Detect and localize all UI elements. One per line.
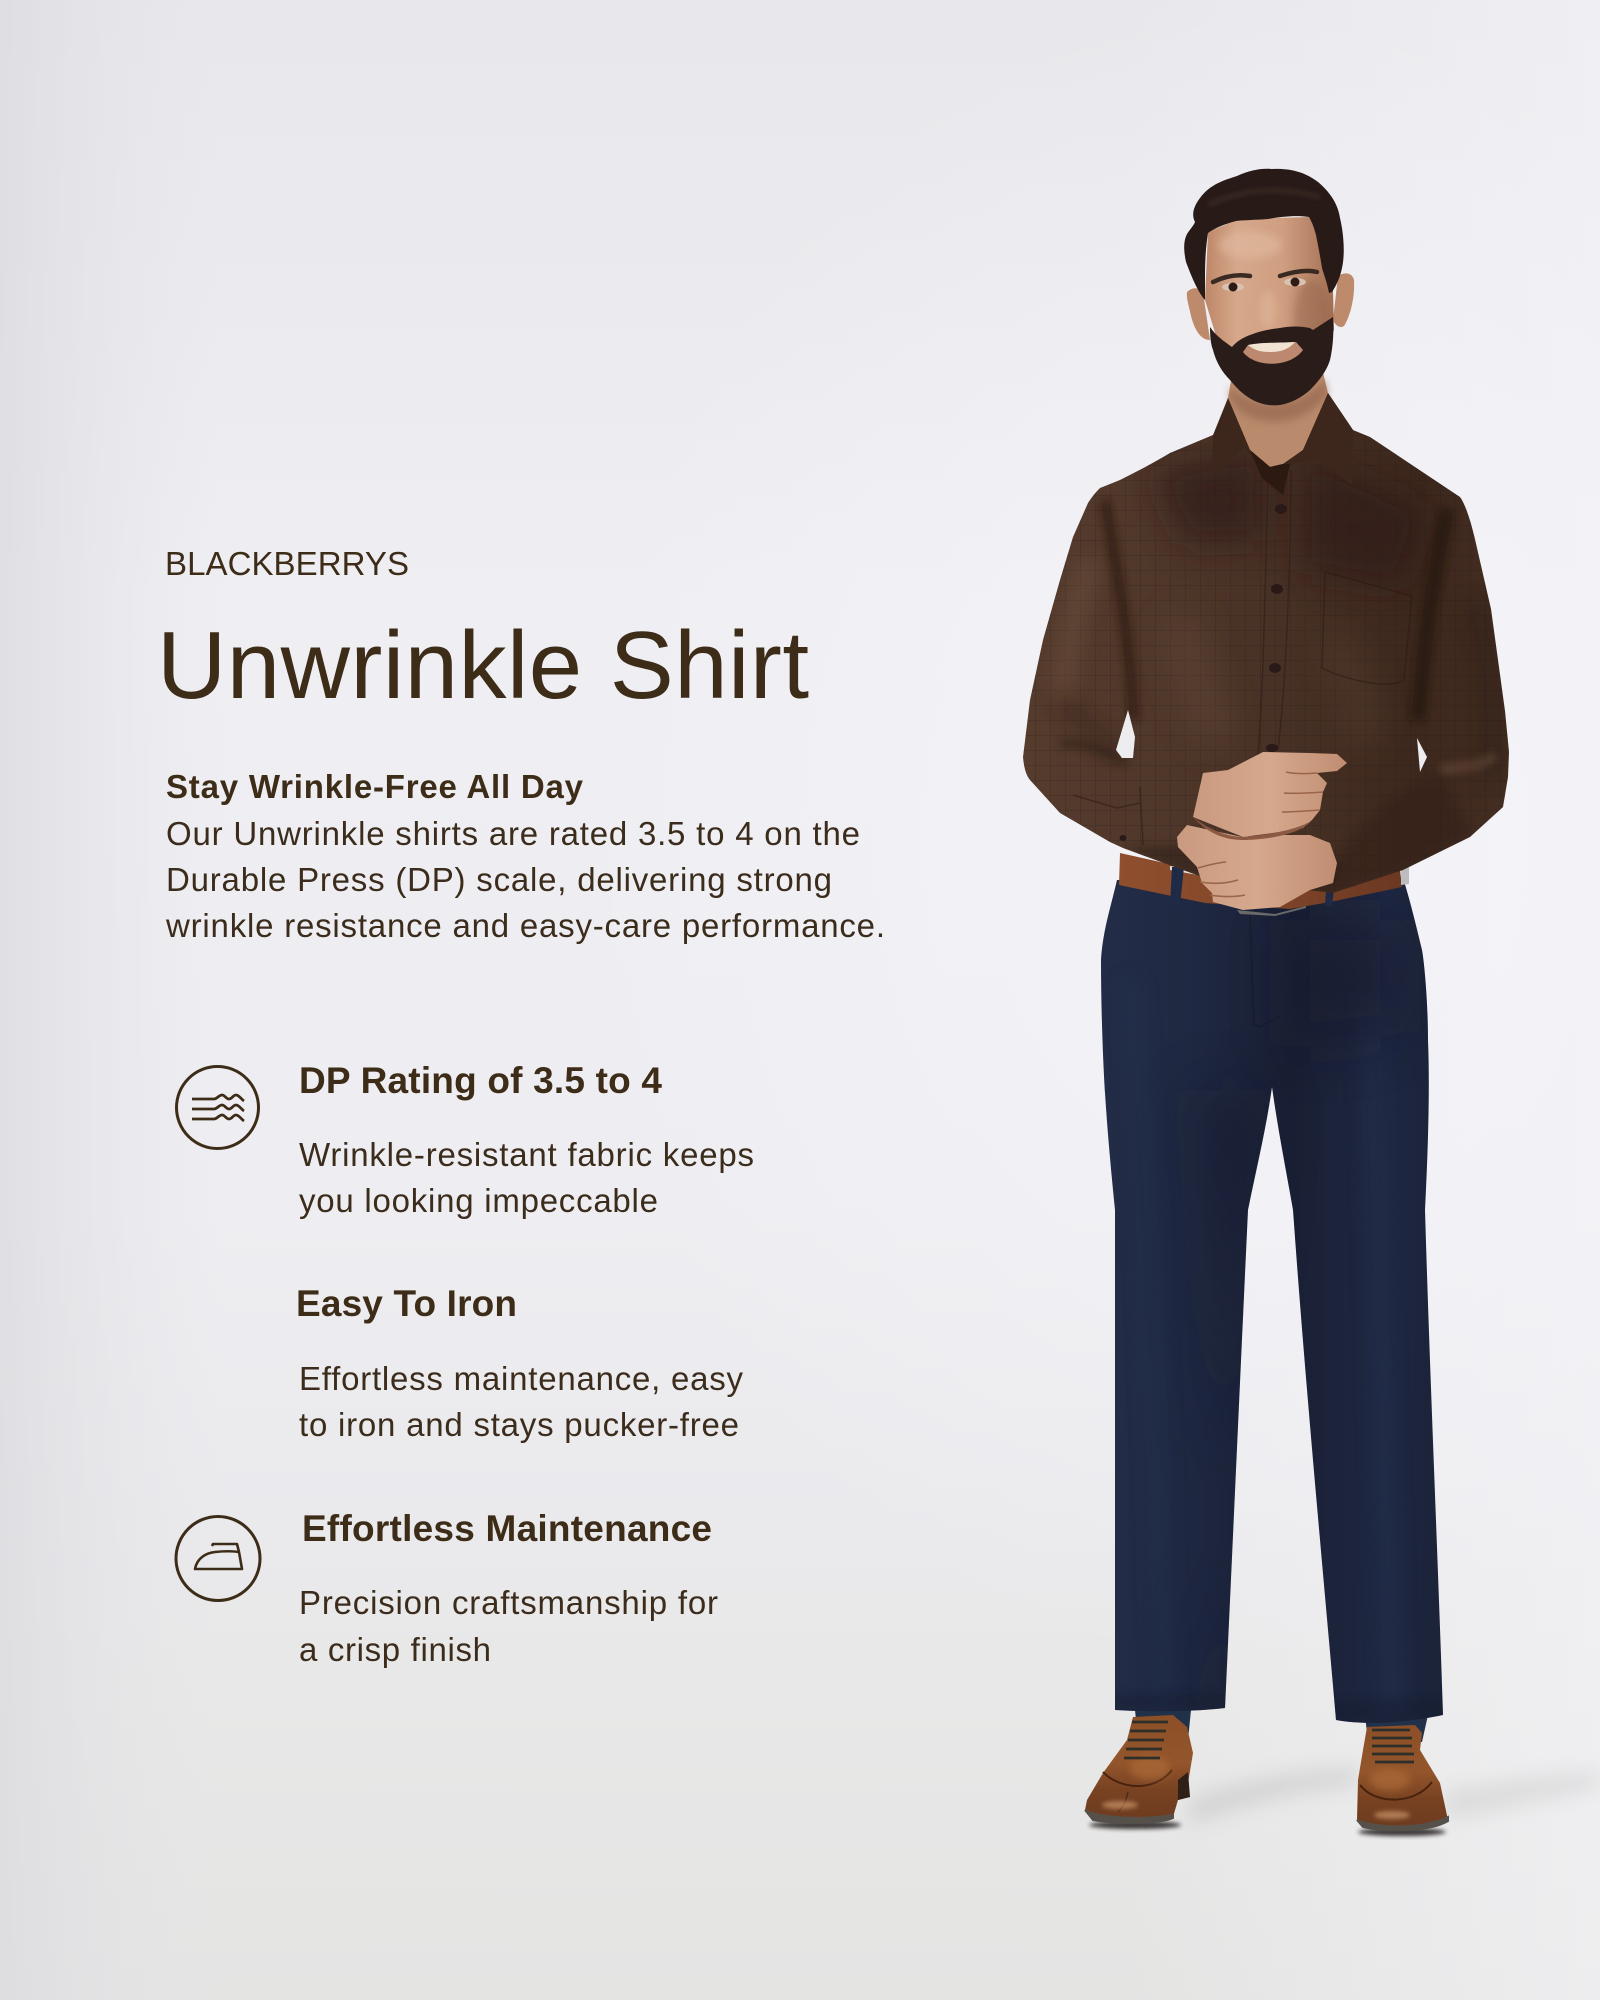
- feature: DP rating: Wrinkle-resistant fabric keeps: [299, 1136, 754, 1173]
- feature: effortless maintenance: Effortless Maintenance: [302, 1508, 712, 1549]
- face: [1205, 217, 1334, 390]
- feature: effortless maintenance: Precision craftsmanship for: [299, 1584, 718, 1621]
- socks: [1134, 1700, 1428, 1742]
- intro text block: wrinkle resistance and easy-care performance.: [165, 907, 885, 944]
- intro text block: [165, 768, 885, 944]
- intro text block: Our Unwrinkle shirts are rated 3.5 to 4 on the: [166, 815, 860, 852]
- right shoe: [1357, 1725, 1448, 1830]
- ears: [1187, 273, 1354, 340]
- intro text block: Stay Wrinkle-Free All Day: [166, 768, 584, 805]
- feature: effortless maintenance: [299, 1508, 718, 1668]
- figure: man in brown shirt and navy trousers: [1010, 169, 1600, 1836]
- feature: DP rating: [299, 1060, 754, 1219]
- feature: easy to iron: to iron and stays pucker-free: [299, 1406, 739, 1443]
- floor shadows: [1089, 1768, 1600, 1836]
- neck shadow: [1230, 378, 1328, 422]
- belt: [1119, 853, 1409, 916]
- armpit gaps: [1116, 710, 1427, 772]
- feature: easy to iron: Easy To Iron: [296, 1283, 517, 1324]
- icon: iron: [176, 1516, 260, 1600]
- collar: [1212, 393, 1353, 500]
- eyebrows: [1213, 271, 1317, 282]
- intro text block: Durable Press (DP) scale, delivering strong: [166, 861, 832, 898]
- title: Unwrinkle Shirt: [157, 612, 809, 719]
- shirt: [1010, 390, 1520, 910]
- hands: [1177, 752, 1347, 910]
- icon: wrinkle waves: [176, 1066, 258, 1148]
- brand label: BLACKBERRYS: [165, 545, 409, 582]
- feature: DP rating: you looking impeccable: [299, 1182, 658, 1219]
- shirt buttons: [1120, 504, 1287, 841]
- feature: effortless maintenance: a crisp finish: [299, 1631, 491, 1668]
- feature: easy to iron: [296, 1283, 744, 1443]
- trousers: [1090, 870, 1460, 1730]
- beard: [1210, 317, 1333, 405]
- feature: easy to iron: Effortless maintenance, easy: [299, 1360, 744, 1397]
- smile: [1243, 342, 1303, 364]
- hair: [1184, 169, 1344, 300]
- eyes: [1222, 278, 1306, 292]
- left shoe: [1085, 1715, 1193, 1823]
- neck: [1228, 368, 1328, 467]
- feature: DP rating: DP Rating of 3.5 to 4: [299, 1060, 662, 1101]
- face shading: [1218, 232, 1328, 330]
